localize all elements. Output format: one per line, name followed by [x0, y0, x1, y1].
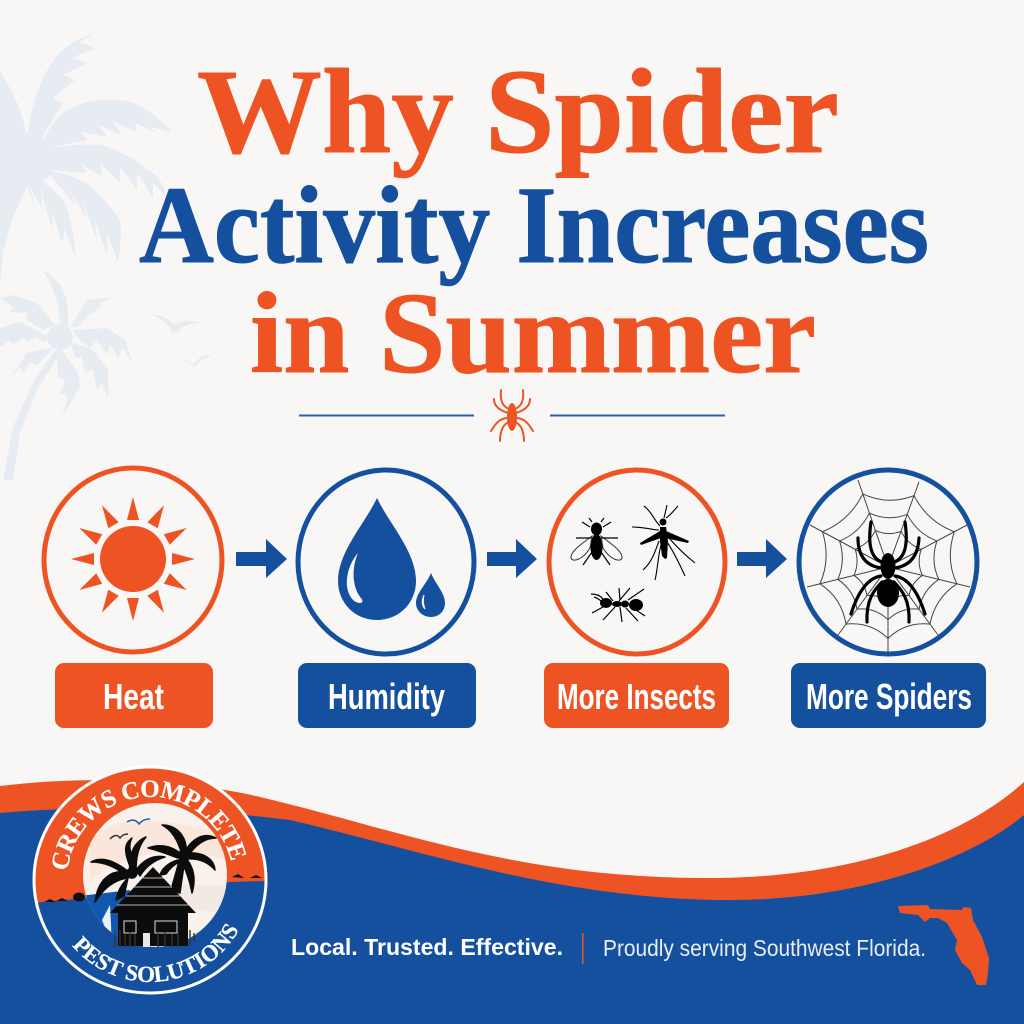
logo text bottom: PEST SOLUTIONS	[72, 923, 238, 982]
spiders circle	[799, 470, 977, 654]
icon: mosquito	[632, 505, 695, 580]
small palm	[0, 270, 133, 480]
title line 3: in Summer	[250, 270, 816, 397]
footer tagline	[291, 933, 926, 964]
insects circle	[549, 470, 725, 654]
icon: Florida map	[898, 905, 989, 985]
icon: fly	[571, 518, 622, 565]
badge scene	[80, 800, 230, 950]
footer wave	[0, 780, 1024, 1024]
logo house	[110, 867, 196, 947]
arrow 3	[737, 539, 787, 578]
icon: sun	[71, 497, 195, 621]
badge rings	[30, 767, 266, 1000]
seagull two	[177, 355, 212, 366]
spiders label	[791, 663, 986, 728]
logo birds	[110, 819, 150, 839]
icon: ant	[591, 588, 645, 622]
icon: water drops	[338, 498, 445, 620]
heat circle	[44, 468, 222, 652]
humidity label	[298, 663, 476, 728]
icon: spider web	[807, 480, 970, 652]
step: more spiders	[791, 470, 986, 728]
tagline separator	[582, 933, 584, 964]
title line 1: Why Spider	[197, 45, 839, 179]
title	[139, 45, 929, 397]
heat label	[55, 663, 213, 728]
background palm trees	[0, 32, 212, 480]
divider with spider	[299, 390, 725, 441]
icon: large spider	[851, 522, 925, 622]
icon: small orange spider	[491, 390, 533, 441]
insects label	[544, 663, 729, 728]
divider line left	[299, 414, 474, 416]
logo insects on horizon	[44, 874, 262, 902]
tagline bold: Local. Trusted. Effective.	[291, 934, 563, 960]
orange wave band	[0, 780, 1024, 900]
logo badge	[32, 766, 268, 994]
step: more insects	[544, 470, 729, 728]
arrow 1	[236, 539, 287, 578]
step: heat	[44, 468, 222, 728]
humidity circle	[298, 470, 474, 654]
seagull one	[152, 315, 202, 332]
logo text top: CREWS COMPLETE	[52, 780, 246, 869]
tagline serving: Proudly serving Southwest Florida.	[603, 935, 926, 961]
blue footer	[0, 808, 1024, 1024]
insects label: More Insects	[557, 676, 716, 717]
large palm	[0, 32, 172, 287]
humidity label: Humidity	[328, 676, 445, 717]
divider line right	[550, 414, 725, 416]
arrow 2	[487, 539, 537, 578]
step: humidity	[298, 470, 476, 728]
title line 2: Activity Increases	[139, 164, 929, 286]
logo palms	[91, 825, 216, 902]
heat label: Heat	[103, 676, 164, 717]
